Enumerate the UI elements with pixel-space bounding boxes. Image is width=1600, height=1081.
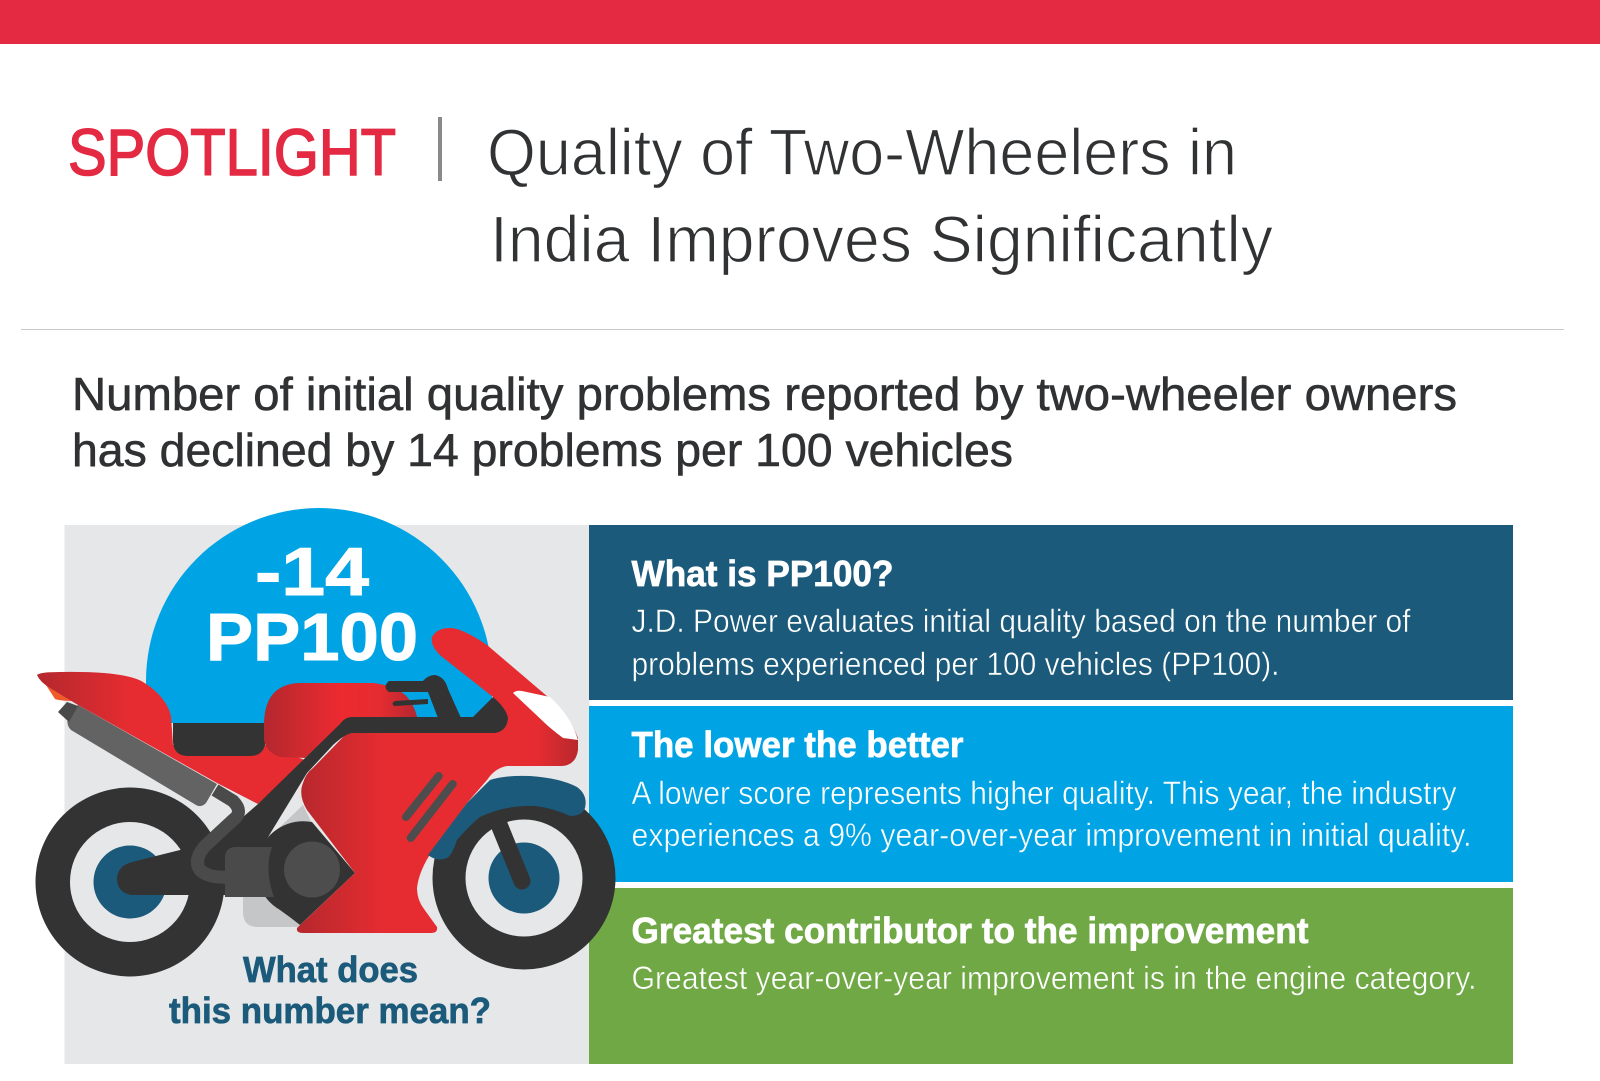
text: lower score explanation: experiences a 9% year-over-year improvement in initial quality.	[632, 817, 1472, 853]
subheading	[72, 368, 1457, 476]
blue semicircle badge	[146, 508, 492, 723]
title: India Improves Significantly	[490, 202, 1273, 276]
header separator	[438, 117, 442, 181]
frame	[205, 697, 508, 850]
text: PP100 explanation: problems experienced per 100 vehicles (PP100).	[632, 646, 1280, 682]
panel: grey motorcycle background	[64, 525, 590, 1064]
text: PP100 explanation: J.D. Power evaluates initial quality based on the number of	[632, 603, 1411, 639]
heading: what is PP100: What is PP100?	[632, 553, 894, 594]
engine	[256, 821, 355, 925]
seat	[173, 723, 265, 756]
fuel tank	[264, 683, 418, 758]
heading: greatest contributor: Greatest contributor to the improvement	[632, 910, 1309, 951]
exhaust tip	[58, 702, 78, 722]
tail light	[46, 685, 76, 701]
heading: the lower the better: The lower the better	[632, 724, 964, 765]
header	[68, 115, 1273, 276]
front fender	[428, 776, 586, 859]
rear wheel	[36, 788, 224, 976]
swingarm	[117, 845, 230, 895]
handlebar	[386, 675, 461, 718]
callout: what does this number mean: What does	[243, 949, 418, 990]
title	[487, 115, 1273, 276]
text: engine category: Greatest year-over-year improvement is in the engine category.	[632, 960, 1476, 996]
headlight	[513, 691, 578, 740]
fairing vents	[406, 776, 453, 838]
main fairing	[297, 628, 578, 933]
exhaust pipe	[197, 790, 238, 877]
front wheel	[432, 786, 616, 970]
callout: what does this number mean: this number mean?	[169, 990, 491, 1031]
subheading: Number of initial quality problems reported by two-wheeler owners	[72, 368, 1457, 420]
panel: what is PP100	[589, 525, 1513, 700]
text: lower score explanation	[632, 775, 1472, 853]
top red bar	[0, 0, 1600, 44]
stat: PP100: PP100	[206, 600, 418, 675]
callout: what does this number mean	[169, 949, 491, 1031]
exhaust muffler	[67, 705, 217, 806]
text: PP100 explanation	[632, 603, 1411, 682]
rear body and tail	[37, 672, 305, 804]
panel: greatest contributor	[589, 888, 1513, 1064]
icon: red motorcycle	[36, 628, 616, 976]
engine gearbox	[225, 847, 274, 897]
stat: minus 14: -14	[255, 534, 369, 610]
title: Quality of Two-Wheelers in	[487, 115, 1237, 189]
panel: the lower the better	[589, 706, 1513, 882]
front fork	[498, 822, 522, 881]
spotlight label: SPOTLIGHT	[68, 115, 396, 189]
light engine block	[243, 805, 315, 927]
subheading: has declined by 14 problems per 100 vehicles	[72, 424, 1013, 476]
text: lower score explanation: A lower score represents higher quality. This year, the industry	[632, 775, 1456, 811]
